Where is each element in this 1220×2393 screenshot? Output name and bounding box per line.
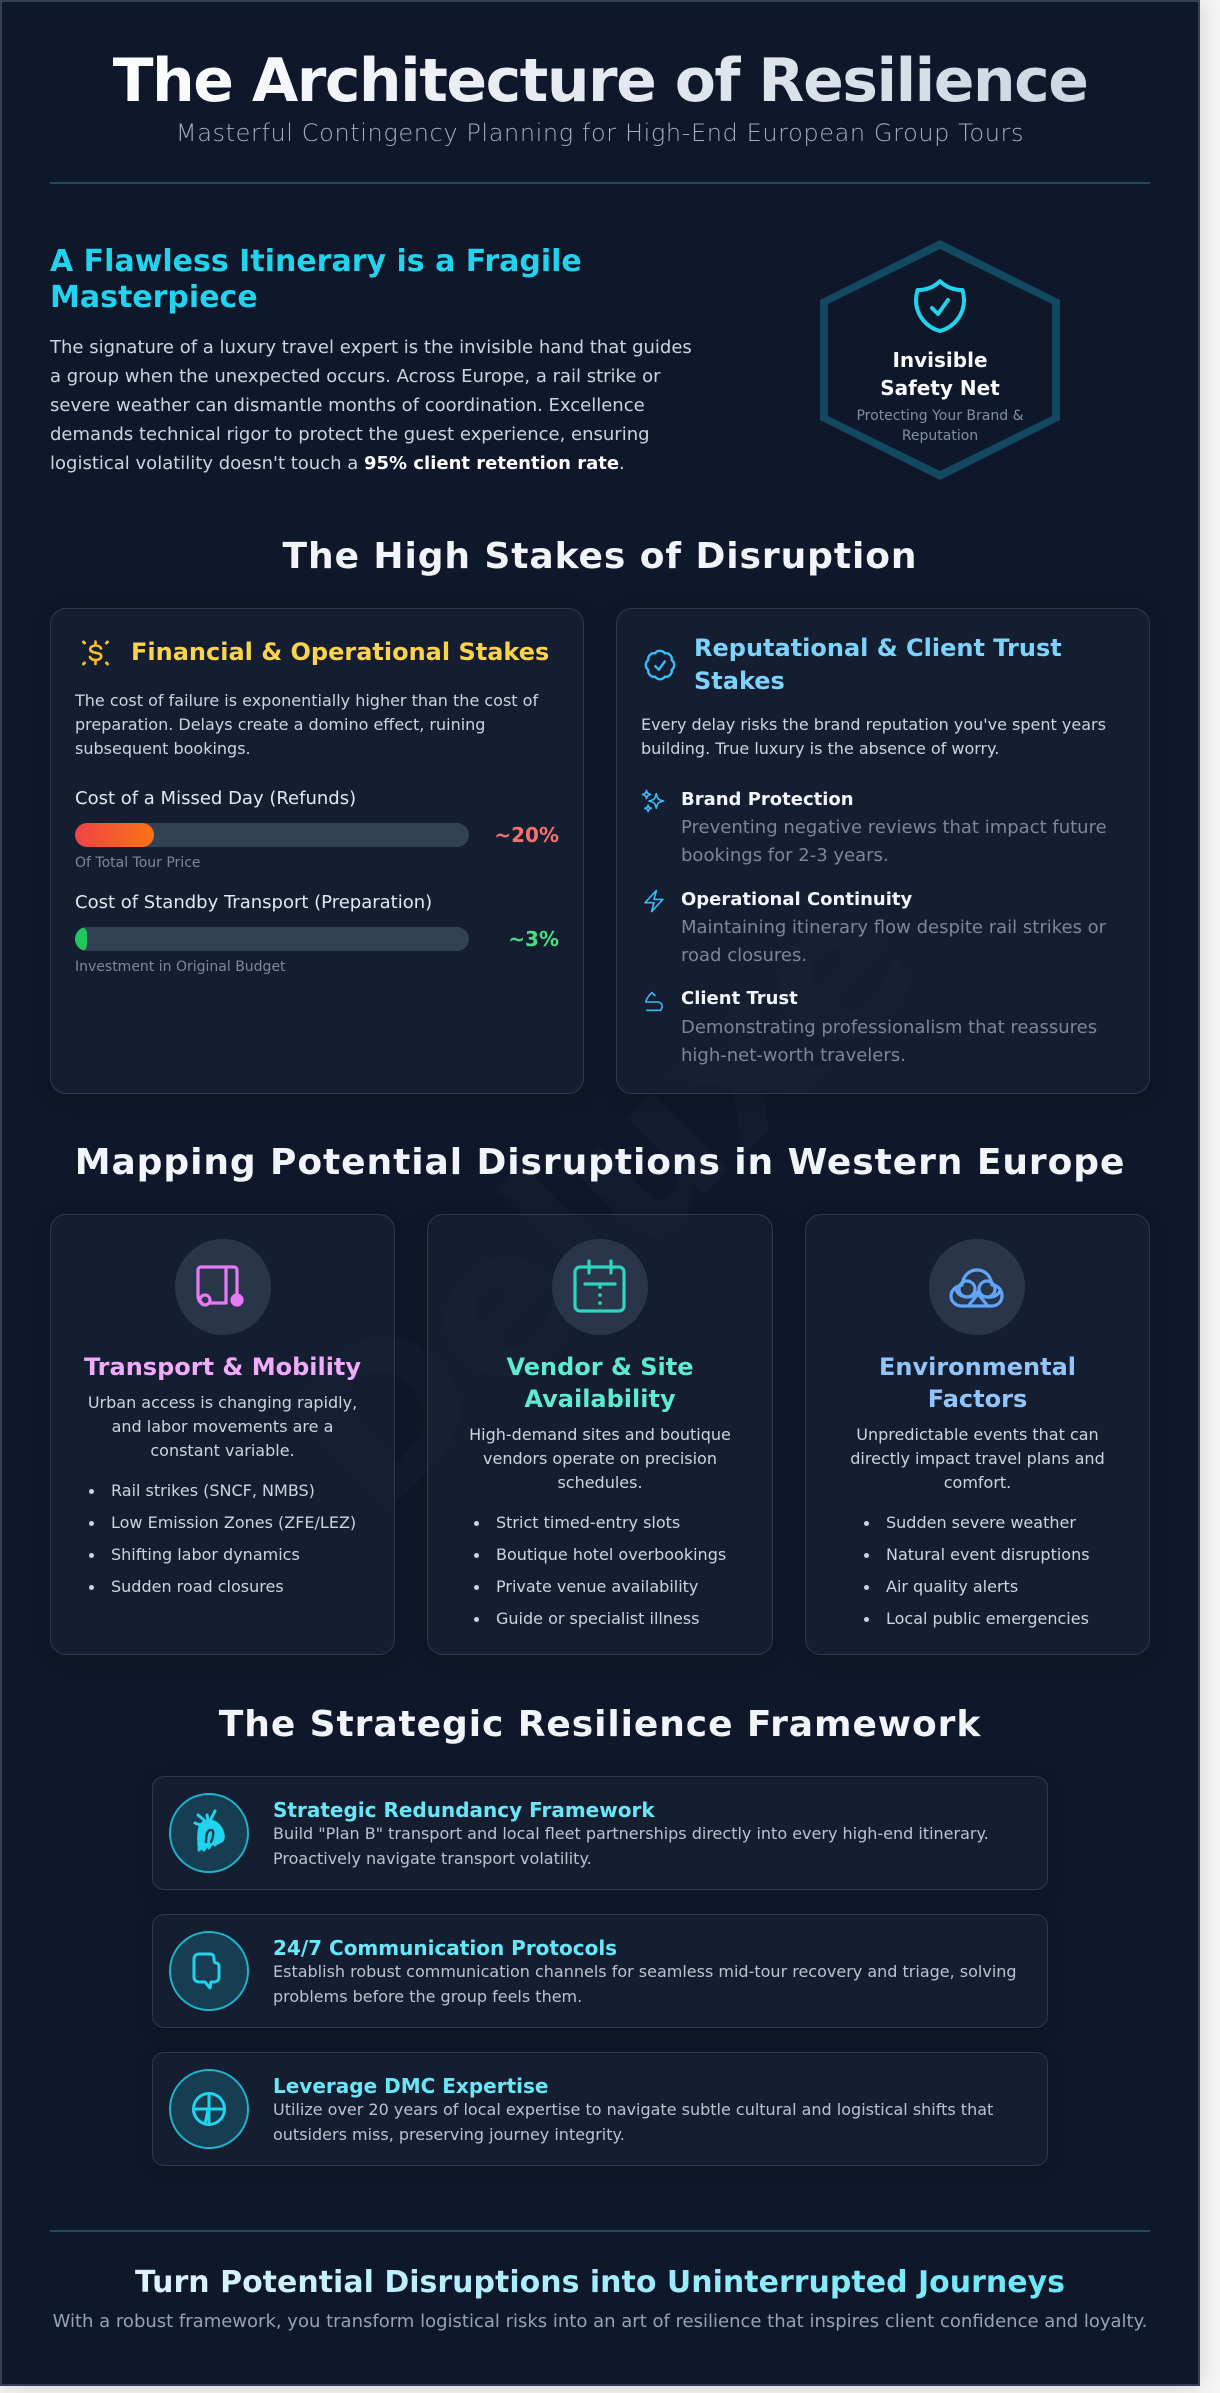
intro paragraph: logistical volatility doesn't touch a 95% client retention rate. (50, 453, 625, 474)
panel: financial and operational stakes (50, 608, 584, 1094)
panel description: subsequent bookings. (75, 739, 251, 758)
item title: Client Trust (681, 988, 798, 1009)
icon circle: calendar (552, 1239, 648, 1335)
panel description: preparation. Delays create a domino effect, ruining (75, 715, 485, 734)
item text: high-net-worth travelers. (681, 1045, 906, 1066)
disruption list (89, 1481, 356, 1596)
panel heading: Factors (928, 1384, 1027, 1412)
list item: Shifting labor dynamics (111, 1545, 300, 1564)
panel heading (879, 1352, 1076, 1412)
framework item: strategic redundancy (152, 1776, 1048, 1890)
intro paragraph (50, 336, 692, 474)
hexagon badge: invisible safety net (820, 240, 1060, 480)
intro heading: A Flawless Itinerary is a Fragile (50, 244, 582, 278)
list item: Natural event disruptions (886, 1545, 1090, 1564)
list item: Sudden severe weather (886, 1513, 1076, 1532)
caption: of total tour price: Of Total Tour Price (75, 855, 201, 871)
item text: road closures. (681, 945, 807, 966)
hexagon outline (820, 240, 1060, 480)
item text: bookings for 2-3 years. (681, 845, 889, 866)
framework item: DMC expertise (152, 2052, 1048, 2166)
framework item: communication protocols (152, 1914, 1048, 2028)
panel heading: Availability (524, 1384, 676, 1412)
icon circle: truck (175, 1239, 271, 1335)
list item: Low Emission Zones (ZFE/LEZ) (111, 1513, 356, 1532)
badge title: Safety Net (880, 376, 1000, 400)
label: cost of standby transport: Cost of Standby Transport (Preparation) (75, 892, 432, 913)
list item: Boutique hotel overbookings (496, 1545, 726, 1564)
panel: reputational and client trust stakes (616, 608, 1150, 1094)
panel description: comfort. (944, 1473, 1011, 1492)
badge caption (856, 408, 1024, 444)
panel heading: Transport & Mobility (84, 1352, 361, 1380)
panel heading: Stakes (694, 667, 785, 695)
intro heading (50, 244, 582, 315)
item text (681, 1017, 1097, 1066)
panel: environmental factors (805, 1214, 1150, 1655)
panel description: directly impact travel plans and (850, 1449, 1105, 1468)
disruption list (474, 1513, 726, 1628)
panel heading: Financial & Operational Stakes (131, 638, 549, 666)
list item: Air quality alerts (886, 1577, 1018, 1596)
icon circle: cloud (929, 1239, 1025, 1335)
badge title (880, 348, 1000, 400)
icon: hand hook (644, 992, 664, 1012)
icon circle (169, 1793, 249, 1873)
bar: missed day 20 percent (75, 823, 469, 847)
panel description (88, 1393, 357, 1460)
item text: problems before the group feels them. (273, 1987, 582, 2006)
icon: dollar with rays (82, 640, 110, 666)
panel description: schedules. (557, 1473, 643, 1492)
panel description (469, 1425, 731, 1492)
icon: check badge (644, 650, 676, 680)
panel description: Unpredictable events that can (856, 1425, 1099, 1444)
disruption list (864, 1513, 1090, 1628)
subtitle: Masterful Contingency Planning for High-End European Group Tours (176, 119, 1024, 147)
item: operational continuity (644, 888, 1106, 966)
list item: Sudden road closures (111, 1577, 284, 1596)
panel description: High-demand sites and boutique (469, 1425, 731, 1444)
panel description: and labor movements are a (112, 1417, 333, 1436)
value: about 3 percent: ~3% (508, 926, 559, 950)
list item: Guide or specialist illness (496, 1609, 699, 1628)
item: client trust (644, 988, 1097, 1066)
icon: calendar (573, 1259, 626, 1313)
badge title: Invisible (892, 348, 988, 372)
item text: outsiders miss, preserving journey integrity. (273, 2125, 625, 2144)
section heading: strategic framework: The Strategic Resilience Framework (219, 1704, 981, 1744)
panel description: building. True luxury is the absence of worry. (641, 739, 999, 758)
section heading: mapping disruptions: Mapping Potential Disruptions in Western Europe (75, 1142, 1125, 1182)
intro paragraph: demands technical rigor to protect the guest experience, ensuring (50, 424, 650, 445)
item text (273, 2100, 993, 2144)
panel description: constant variable. (150, 1441, 295, 1460)
value: about 20 percent: ~20% (494, 823, 559, 847)
divider (50, 182, 1150, 184)
icon: globe (192, 2092, 226, 2126)
item text (681, 917, 1106, 966)
intro heading: Masterpiece (50, 280, 258, 315)
list item: Local public emergencies (886, 1609, 1089, 1628)
icon: cloud (949, 1268, 1004, 1308)
item text: Build "Plan B" transport and local fleet partnerships directly into every high-end itinerary. (273, 1824, 989, 1843)
item title: Operational Continuity (681, 888, 912, 910)
icon: bolt (644, 890, 664, 912)
panel heading: Environmental (879, 1352, 1076, 1380)
item text: Preventing negative reviews that impact future (681, 817, 1107, 838)
list item: Private venue availability (496, 1577, 698, 1596)
item text: Establish robust communication channels for seamless mid-tour recovery and triage, solving (273, 1962, 1017, 1981)
badge caption: Reputation (902, 428, 978, 444)
list item: Strict timed-entry slots (496, 1513, 680, 1532)
icon: redundancy emblem (194, 1809, 225, 1852)
panel description (850, 1425, 1105, 1492)
panel heading: Reputational & Client Trust (694, 634, 1062, 662)
item title: Brand Protection (681, 789, 854, 810)
footer text: With a robust framework, you transform logistical risks into an art of resilience that inspires client confidence and loyalty. (53, 2310, 1147, 2332)
section heading: high stakes: The High Stakes of Disruption (283, 536, 917, 576)
panel: transport and mobility (50, 1214, 395, 1655)
intro paragraph: a group when the unexpected occurs. Across Europe, a rail strike or (50, 366, 661, 387)
panel description: The cost of failure is exponentially higher than the cost of (75, 690, 538, 710)
panel heading: Vendor & Site (506, 1352, 694, 1380)
background watermark: Deluxe (247, 840, 962, 1555)
item text: Utilize over 20 years of local expertise to navigate subtle cultural and logistical shifts that (273, 2100, 993, 2119)
icon circle (169, 1931, 249, 2011)
item text: Proactively navigate transport volatility. (273, 1849, 592, 1868)
panel heading (694, 634, 1062, 695)
icon: truck (196, 1265, 244, 1307)
item text (273, 1824, 989, 1868)
badge caption: Protecting Your Brand & (856, 408, 1024, 424)
title: The Architecture of Resilience (113, 46, 1087, 116)
panel: vendor and site availability (427, 1214, 773, 1655)
item text (681, 817, 1107, 866)
item title: Strategic Redundancy Framework (273, 1798, 655, 1822)
icon circle (169, 2069, 249, 2149)
bar: standby transport 3 percent (75, 927, 469, 951)
intro paragraph: severe weather can dismantle months of coordination. Excellence (50, 395, 645, 416)
label: cost of a missed day: Cost of a Missed Day (Refunds) (75, 788, 356, 809)
footer call to action: Turn Potential Disruptions into Uninterrupted Journeys (135, 2264, 1065, 2300)
icon: chat bubble (192, 1952, 220, 1990)
panel heading (506, 1352, 694, 1412)
item text (273, 1962, 1017, 2006)
list item: Rail strikes (SNCF, NMBS) (111, 1481, 315, 1500)
icon: shield check (914, 279, 966, 333)
item: brand protection (642, 789, 1107, 866)
item title: 24/7 Communication Protocols (273, 1936, 617, 1960)
caption: investment in original budget: Investment in Original Budget (75, 959, 286, 975)
divider (50, 2230, 1150, 2232)
intro paragraph: The signature of a luxury travel expert is the invisible hand that guides (50, 336, 692, 358)
item text: Demonstrating professionalism that reassures (681, 1017, 1097, 1038)
item title: Leverage DMC Expertise (273, 2074, 548, 2098)
item text: Maintaining itinerary flow despite rail strikes or (681, 917, 1106, 938)
panel description (74, 690, 538, 758)
panel description: Urban access is changing rapidly, (88, 1393, 357, 1412)
panel description (641, 715, 1106, 758)
panel description: Every delay risks the brand reputation you've spent years (641, 715, 1106, 734)
panel description: vendors operate on precision (483, 1449, 717, 1468)
icon: sparkles (642, 790, 664, 812)
